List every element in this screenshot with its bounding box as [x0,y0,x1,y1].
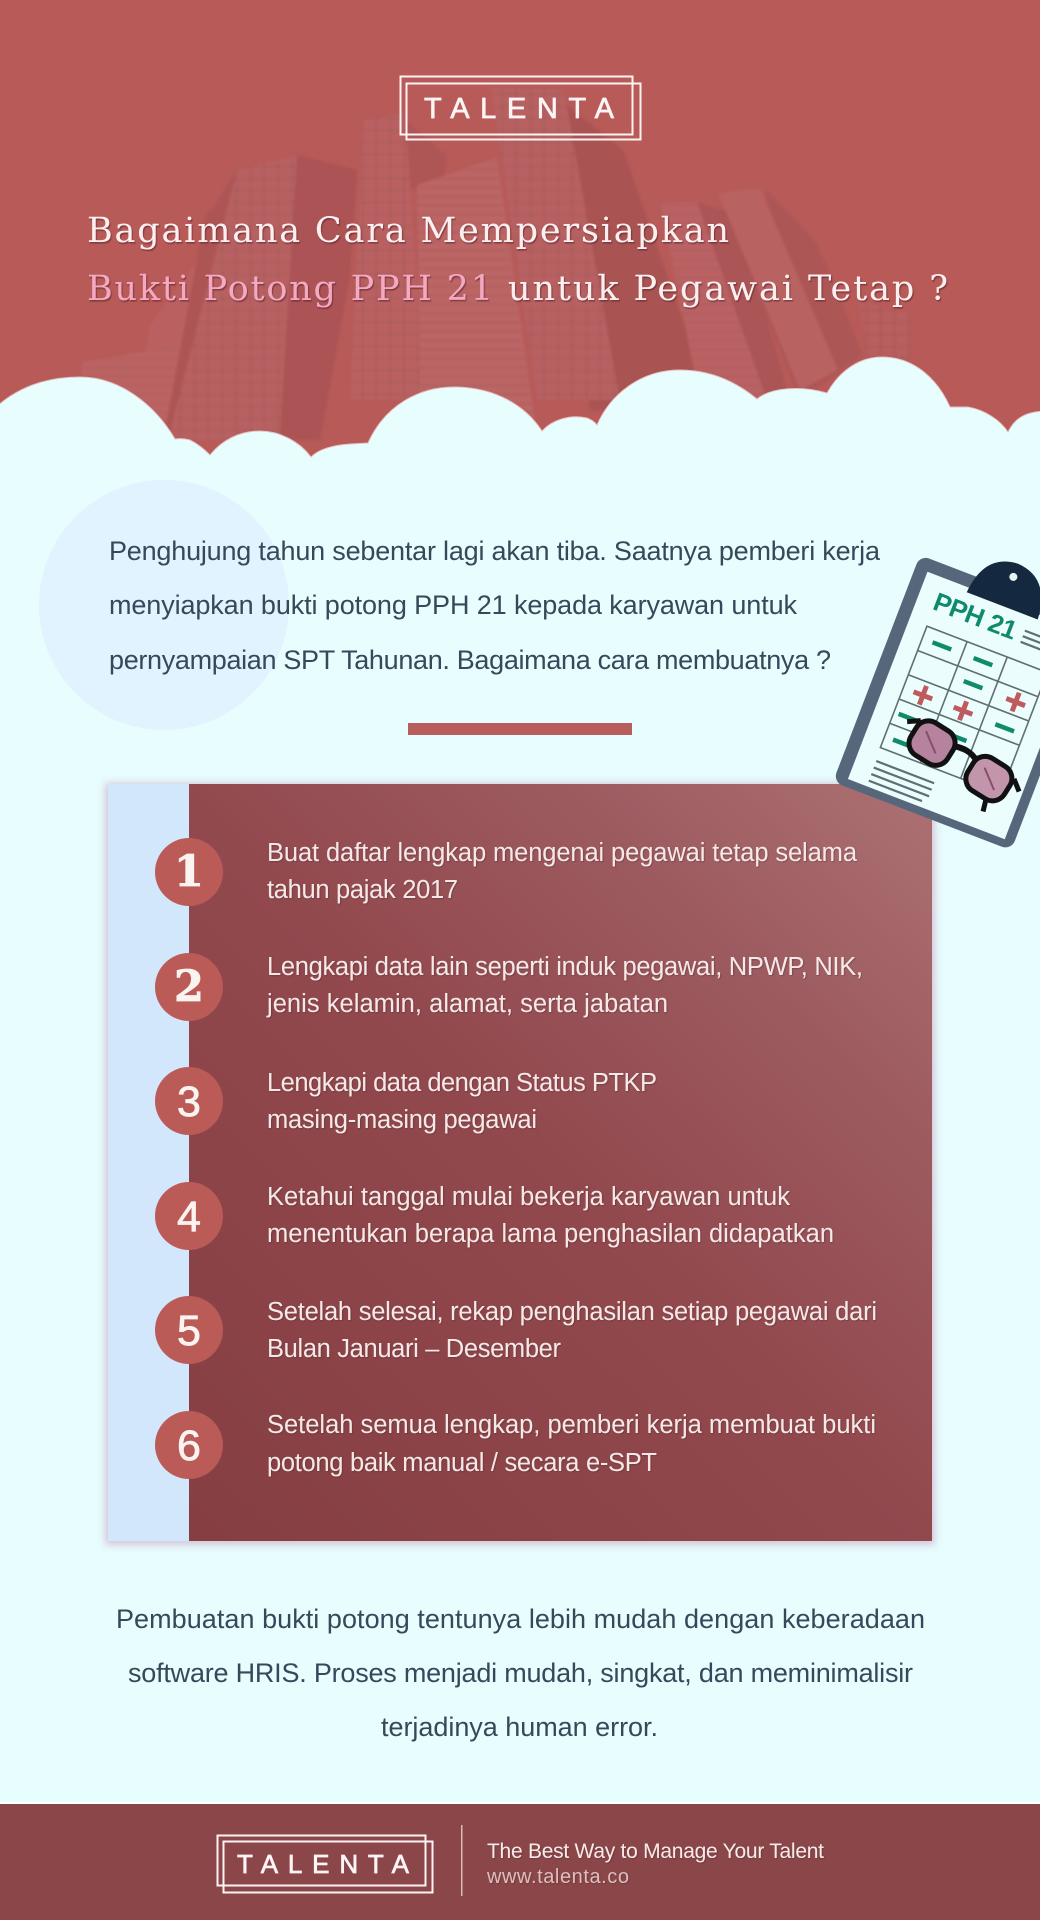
title [87,211,948,309]
footer logo: TALENTA [218,1836,432,1892]
step 5 [155,1296,877,1364]
footer band [0,1802,1040,1920]
step 6: potong baik manual / secara e-SPT [267,1449,657,1477]
icon: clipboard PPH 21 [833,530,1040,850]
step 4: menentukan berapa lama penghasilan didapatkan [267,1220,834,1248]
step 3 [155,1067,657,1135]
skyline of buildings [78,87,910,450]
step 5: Setelah selesai, rekap penghasilan setiap pegawai dari [267,1298,877,1326]
closing paragraph [116,1604,925,1742]
step 2: 2 [174,962,204,1012]
step 4: Ketahui tanggal mulai bekerja karyawan untuk [267,1183,790,1211]
step 1 [155,838,858,906]
step 3: masing-masing pegawai [267,1106,537,1134]
footer tagline [486,1840,824,1888]
panel: steps [105,783,935,1545]
step 2: jenis kelamin, alamat, serta jabatan [266,990,668,1018]
intro paragraph: pernyampaian SPT Tahunan. Bagaimana cara membuatnya ? [109,645,831,675]
title: untuk Pegawai Tetap ? [508,269,948,309]
footer vertical rule [461,1825,462,1896]
top logo: TALENTA: TALENTA [424,93,615,125]
step 1: tahun pajak 2017 [267,876,458,904]
footer tagline: The Best Way to Manage Your Talent [487,1840,824,1863]
top logo: TALENTA [400,76,640,140]
step 6: 6 [177,1422,201,1470]
icon: clipboard PPH 21: PPH 21 [929,586,1021,645]
step 4 [155,1182,834,1250]
step 6: Setelah semua lengkap, pemberi kerja membuat bukti [267,1411,876,1439]
intro paragraph: menyiapkan bukti potong PPH 21 kepada karyawan untuk [109,590,798,620]
title: Bukti Potong PPH 21 [87,269,493,309]
closing paragraph: terjadinya human error. [381,1712,658,1742]
step 1: Buat daftar lengkap mengenai pegawai tetap selama [267,839,858,867]
step 4: 4 [177,1193,201,1241]
intro paragraph [109,536,881,675]
intro paragraph: Penghujung tahun sebentar lagi akan tiba. Saatnya pemberi kerja [109,536,881,566]
step 5: Bulan Januari – Desember [267,1335,562,1363]
decorative pale circle [39,480,289,730]
step 5: 5 [177,1307,201,1355]
step 3: 3 [177,1078,201,1126]
cloud body background [0,357,1040,1810]
step 3: Lengkapi data dengan Status PTKP [267,1069,657,1097]
title: Bagaimana Cara Mempersiapkan [87,211,729,251]
step 2 [155,953,863,1021]
closing paragraph: Pembuatan bukti potong tentunya lebih mudah dengan keberadaan [116,1604,925,1634]
divider bar [408,723,632,735]
closing paragraph: software HRIS. Proses menjadi mudah, singkat, dan meminimalisir [128,1658,913,1688]
step 2: Lengkapi data lain seperti induk pegawai, NPWP, NIK, [267,953,863,981]
step 1: 1 [174,847,204,897]
footer logo: TALENTA: TALENTA [237,1849,410,1879]
step 6 [155,1411,876,1479]
footer tagline: www.talenta.co [486,1866,629,1888]
header background [0,0,1040,480]
